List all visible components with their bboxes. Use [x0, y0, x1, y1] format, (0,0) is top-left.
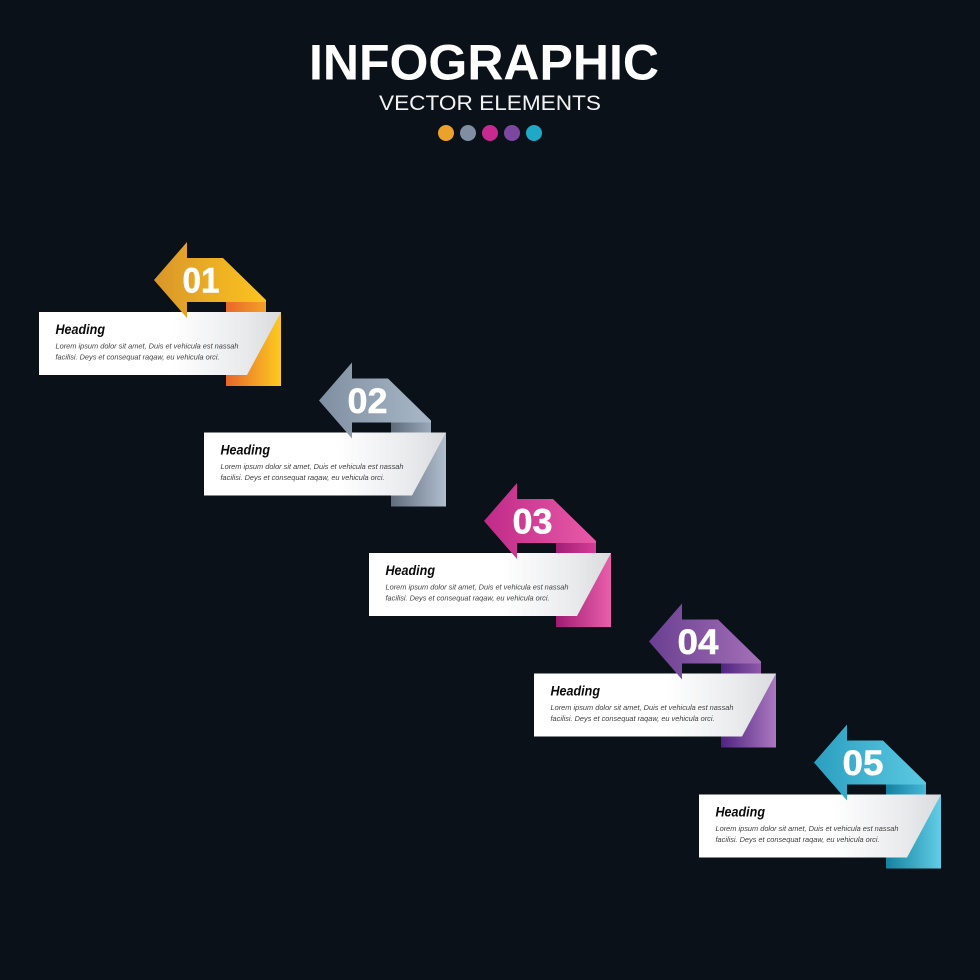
white card — [369, 553, 611, 616]
body text: Lorem ipsum dolor sit amet, Duis et vehicula est nassah — [716, 824, 898, 833]
ribbon back panel — [556, 553, 611, 627]
step 03 — [369, 483, 611, 627]
ribbon fold — [886, 784, 926, 796]
step 01 — [39, 242, 281, 386]
colour dots — [438, 125, 542, 141]
white card — [699, 794, 941, 858]
title: INFOGRAPHIC — [309, 34, 659, 90]
body text: Lorem ipsum dolor sit amet, Duis et vehicula est nassah — [386, 582, 568, 592]
number: 01 — [182, 260, 220, 300]
number: 02 — [348, 381, 388, 421]
step 04 — [534, 604, 776, 748]
arrow — [484, 483, 596, 559]
number: 03 — [512, 502, 552, 542]
ribbon fold — [226, 301, 266, 313]
ribbon back panel — [226, 312, 281, 386]
white card — [204, 432, 446, 496]
ribbon back panel — [721, 674, 776, 748]
ribbon back panel — [391, 432, 446, 506]
white card — [534, 674, 776, 736]
heading: Heading — [550, 684, 601, 698]
heading: Heading — [386, 563, 436, 578]
body text: Lorem ipsum dolor sit amet, Duis et vehicula est nassah — [550, 703, 734, 712]
ribbon fold — [721, 662, 761, 674]
number: 04 — [678, 622, 719, 662]
arrow — [814, 724, 926, 800]
heading: Heading — [716, 804, 766, 820]
body text: facilisi. Deys et consequat raqaw, eu vehicula orci. — [386, 594, 550, 602]
white card — [39, 312, 281, 375]
body text: Lorem ipsum dolor sit amet, Duis et vehicula est nassah — [220, 462, 404, 471]
ribbon back panel — [886, 794, 941, 868]
body text: facilisi. Deys et consequat raqaw, eu vehicula orci. — [56, 352, 220, 362]
heading: Heading — [220, 442, 271, 458]
number: 05 — [842, 743, 884, 783]
body text: facilisi. Deys et consequat raqaw, eu vehicula orci. — [220, 473, 384, 482]
ribbon fold — [391, 422, 431, 434]
step 02 — [204, 362, 446, 506]
arrow — [154, 242, 266, 318]
arrow — [649, 604, 761, 680]
arrow — [319, 362, 431, 438]
ribbon fold — [556, 542, 596, 554]
subtitle: VECTOR ELEMENTS — [379, 92, 601, 115]
body text: facilisi. Deys et consequat raqaw, eu vehicula orci. — [716, 835, 880, 844]
step 05 — [699, 724, 941, 868]
heading: Heading — [56, 322, 106, 337]
body text: facilisi. Deys et consequat raqaw, eu vehicula orci. — [550, 714, 714, 723]
body text: Lorem ipsum dolor sit amet, Duis et vehicula est nassah — [56, 342, 238, 350]
